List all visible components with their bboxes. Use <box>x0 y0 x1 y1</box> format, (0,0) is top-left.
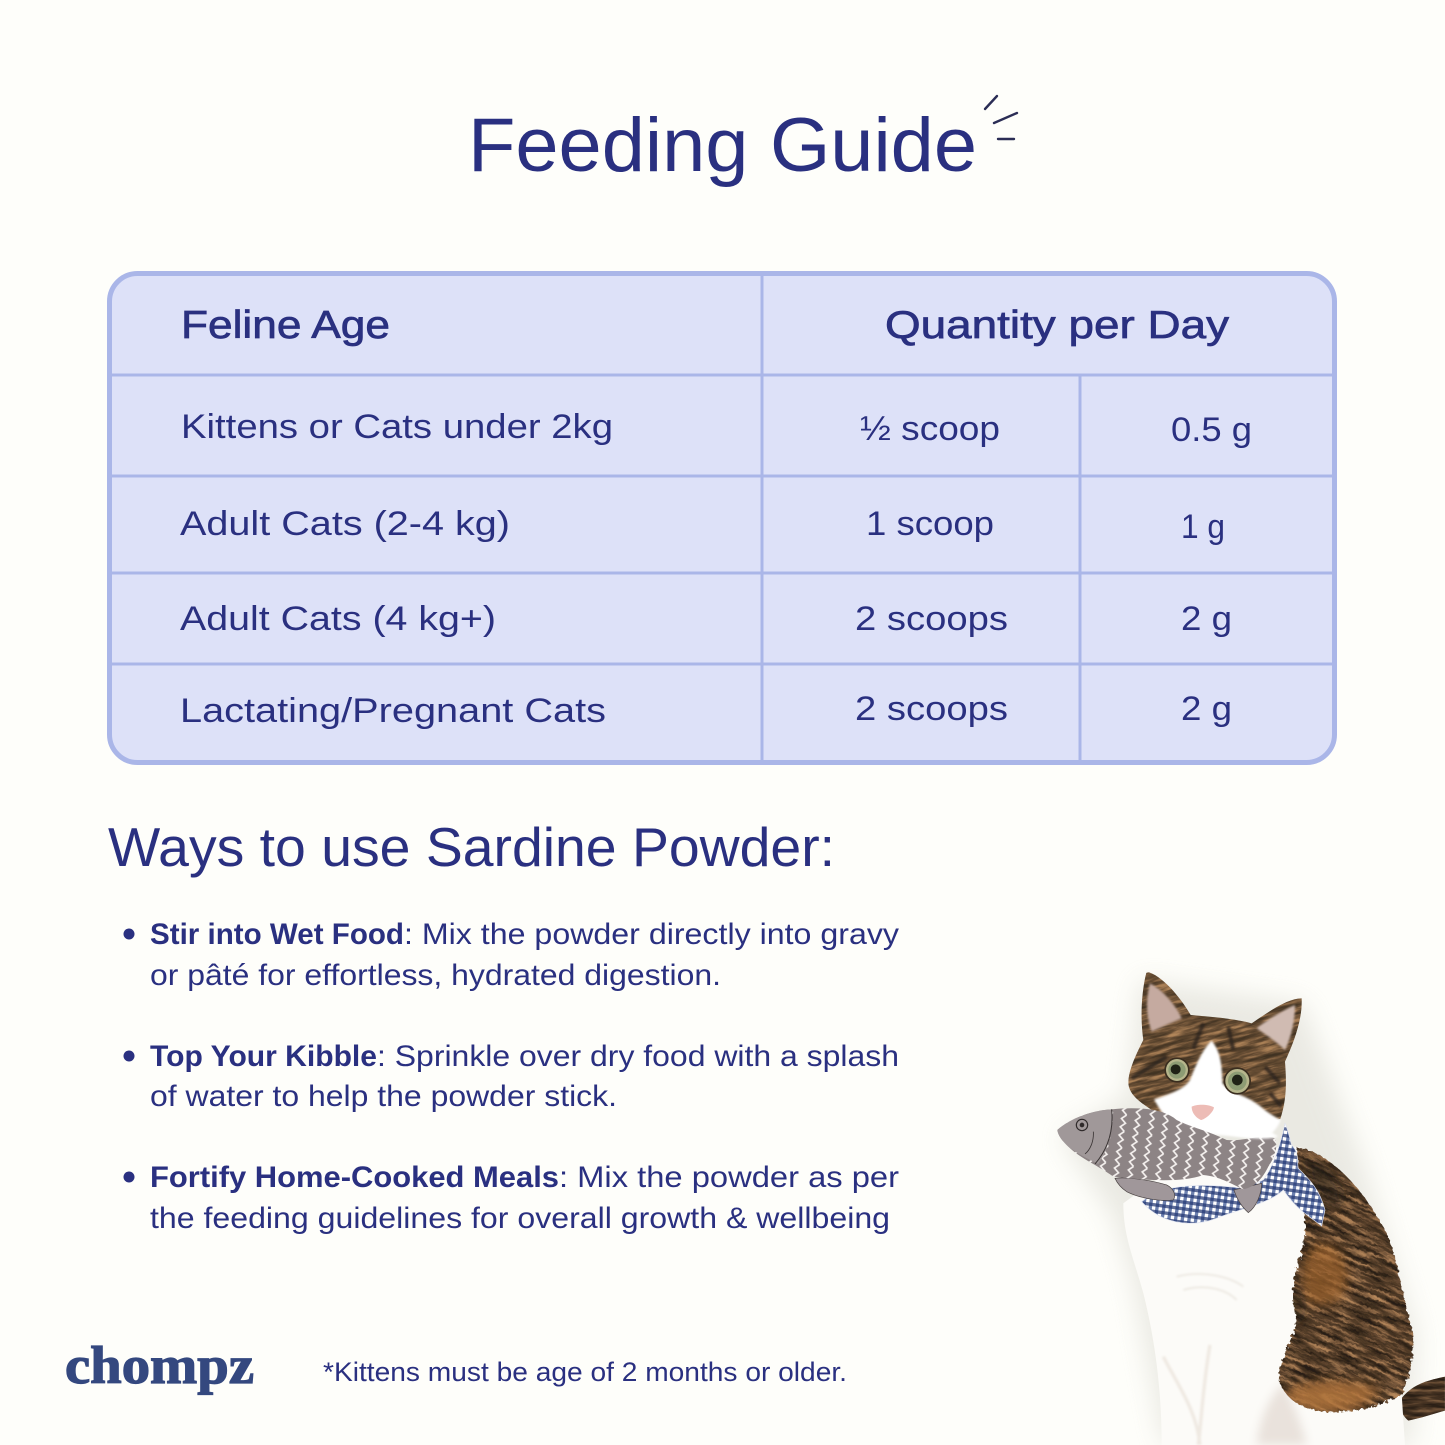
cat soft shadow <box>1060 980 1417 1445</box>
toy fish <box>1057 1108 1276 1213</box>
row: adult cats 4 kg+: Adult Cats (4 kg+) <box>180 600 496 638</box>
bullet: top your kibble <box>124 1040 899 1113</box>
row: kittens: 0.5 g <box>1171 411 1252 449</box>
bullet: top your kibble: : Sprinkle over dry food with a splash <box>377 1040 899 1073</box>
row: lactating or pregnant cats: 2 scoops <box>855 690 1008 728</box>
row: adult cats 2-4 kg: 1 scoop <box>866 505 994 543</box>
row: adult cats 4 kg+: 2 g <box>1181 600 1232 638</box>
bullet: fortify home-cooked meals: : Mix the powder as per <box>559 1161 899 1194</box>
cat nose <box>1192 1105 1214 1120</box>
row: adult cats 2-4 kg: 1 g <box>1181 508 1225 546</box>
cat head <box>1128 972 1302 1137</box>
bandana <box>1142 1123 1325 1226</box>
panel: feeding table <box>110 274 1334 762</box>
bullet: top your kibble: Top Your Kibble <box>150 1040 377 1073</box>
cat eyes <box>1164 1057 1251 1095</box>
bullet: stir into wet food: or pâté for effortless, hydrated digestion. <box>150 959 721 992</box>
bullet: stir into wet food: Stir into Wet Food <box>150 918 404 951</box>
bullet: stir into wet food: : Mix the powder directly into gravy <box>404 918 899 951</box>
illustration: cat holding toy fish <box>1057 934 1445 1445</box>
row: adult cats 2-4 kg <box>180 505 1225 546</box>
row: kittens: Kittens or Cats under 2kg <box>181 408 613 446</box>
row: lactating or pregnant cats: 2 g <box>1181 690 1232 728</box>
row: adult cats 4 kg+: 2 scoops <box>855 600 1008 638</box>
cat tail <box>1402 1376 1445 1421</box>
bullet: fortify home-cooked meals <box>124 1161 899 1235</box>
cat muzzle <box>1163 1100 1278 1139</box>
row: lactating or pregnant cats: Lactating/Pregnant Cats <box>180 692 606 730</box>
bullet: top your kibble: of water to help the powder stick. <box>150 1080 617 1113</box>
cat body <box>1124 1146 1414 1445</box>
footnote: *Kittens must be age of 2 months or older. <box>323 1357 847 1387</box>
icon: sparkle accent strokes <box>985 96 1017 139</box>
bullet: fortify home-cooked meals: Fortify Home-Cooked Meals <box>150 1161 559 1194</box>
logo: chompz: chompz <box>65 1337 254 1395</box>
table header: feline age: Feline Age <box>181 304 390 347</box>
row: kittens <box>181 408 1252 449</box>
row: adult cats 4 kg+ <box>180 600 1232 638</box>
table header: quantity per day: Quantity per Day <box>885 304 1230 347</box>
row: kittens: ½ scoop <box>860 410 1000 448</box>
bullet: stir into wet food <box>124 918 899 992</box>
row: adult cats 2-4 kg: Adult Cats (2-4 kg) <box>180 505 510 543</box>
bullet: fortify home-cooked meals: the feeding guidelines for overall growth & wellbeing <box>150 1202 890 1235</box>
row: lactating or pregnant cats <box>180 690 1232 730</box>
heading: ways to use: Ways to use Sardine Powder: <box>108 816 835 878</box>
title: Feeding Guide <box>468 103 977 188</box>
